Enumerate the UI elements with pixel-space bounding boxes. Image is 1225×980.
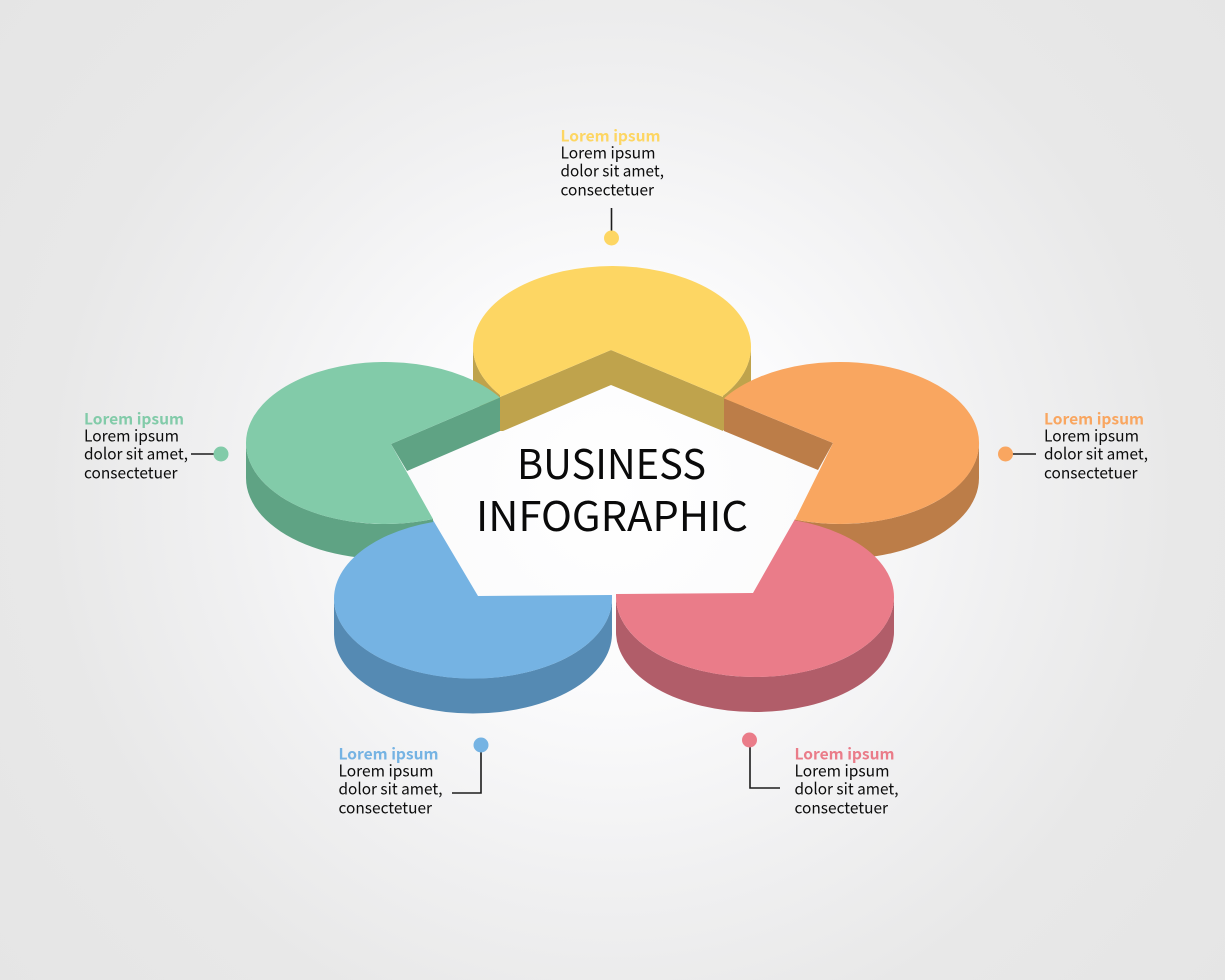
segment: pink — [616, 519, 894, 712]
callout: orange: consectetuer — [1044, 460, 1138, 484]
callout: yellow: Lorem ipsum — [560, 124, 660, 146]
connector: pink — [750, 745, 780, 788]
callout: blue: consectetuer — [338, 794, 433, 818]
segment: orange — [724, 362, 979, 559]
callout: pink — [742, 732, 898, 818]
callout: pink: Lorem ipsum — [794, 758, 890, 782]
connector: yellow — [610, 208, 612, 232]
callout: pink: consectetuer — [794, 794, 889, 818]
callout: blue — [338, 738, 488, 818]
title: INFOGRAPHIC — [476, 483, 748, 543]
callout: pink: Lorem ipsum — [794, 742, 894, 764]
callout: green: Lorem ipsum — [84, 408, 184, 430]
callout: blue: dolor sit amet, — [338, 776, 442, 800]
callout: yellow: Lorem ipsum — [560, 140, 656, 164]
callout: blue: Lorem ipsum — [338, 758, 434, 782]
connector: green — [191, 453, 216, 455]
callout: green: Lorem ipsum — [84, 422, 179, 446]
callout: pink: dolor sit amet, — [794, 776, 898, 800]
segment: green — [246, 362, 500, 559]
callout: yellow: dolor sit amet, — [560, 158, 664, 182]
connector: blue — [452, 750, 481, 793]
callout: green: consectetuer — [84, 460, 178, 484]
callout: yellow — [560, 124, 664, 246]
callout: blue: Lorem ipsum — [338, 742, 438, 764]
callout: orange: Lorem ipsum — [1044, 422, 1139, 446]
callout: green — [84, 408, 228, 484]
callout: yellow: consectetuer — [560, 176, 655, 200]
callout: green: dolor sit amet, — [84, 440, 188, 464]
title: BUSINESS — [517, 431, 706, 491]
connector: orange — [1011, 453, 1036, 455]
callout: orange: dolor sit amet, — [1044, 440, 1148, 464]
callout: orange: Lorem ipsum — [1044, 408, 1144, 430]
segment: yellow — [473, 266, 751, 431]
title — [476, 431, 748, 543]
segment: blue — [334, 520, 612, 714]
callout: orange — [998, 408, 1148, 484]
